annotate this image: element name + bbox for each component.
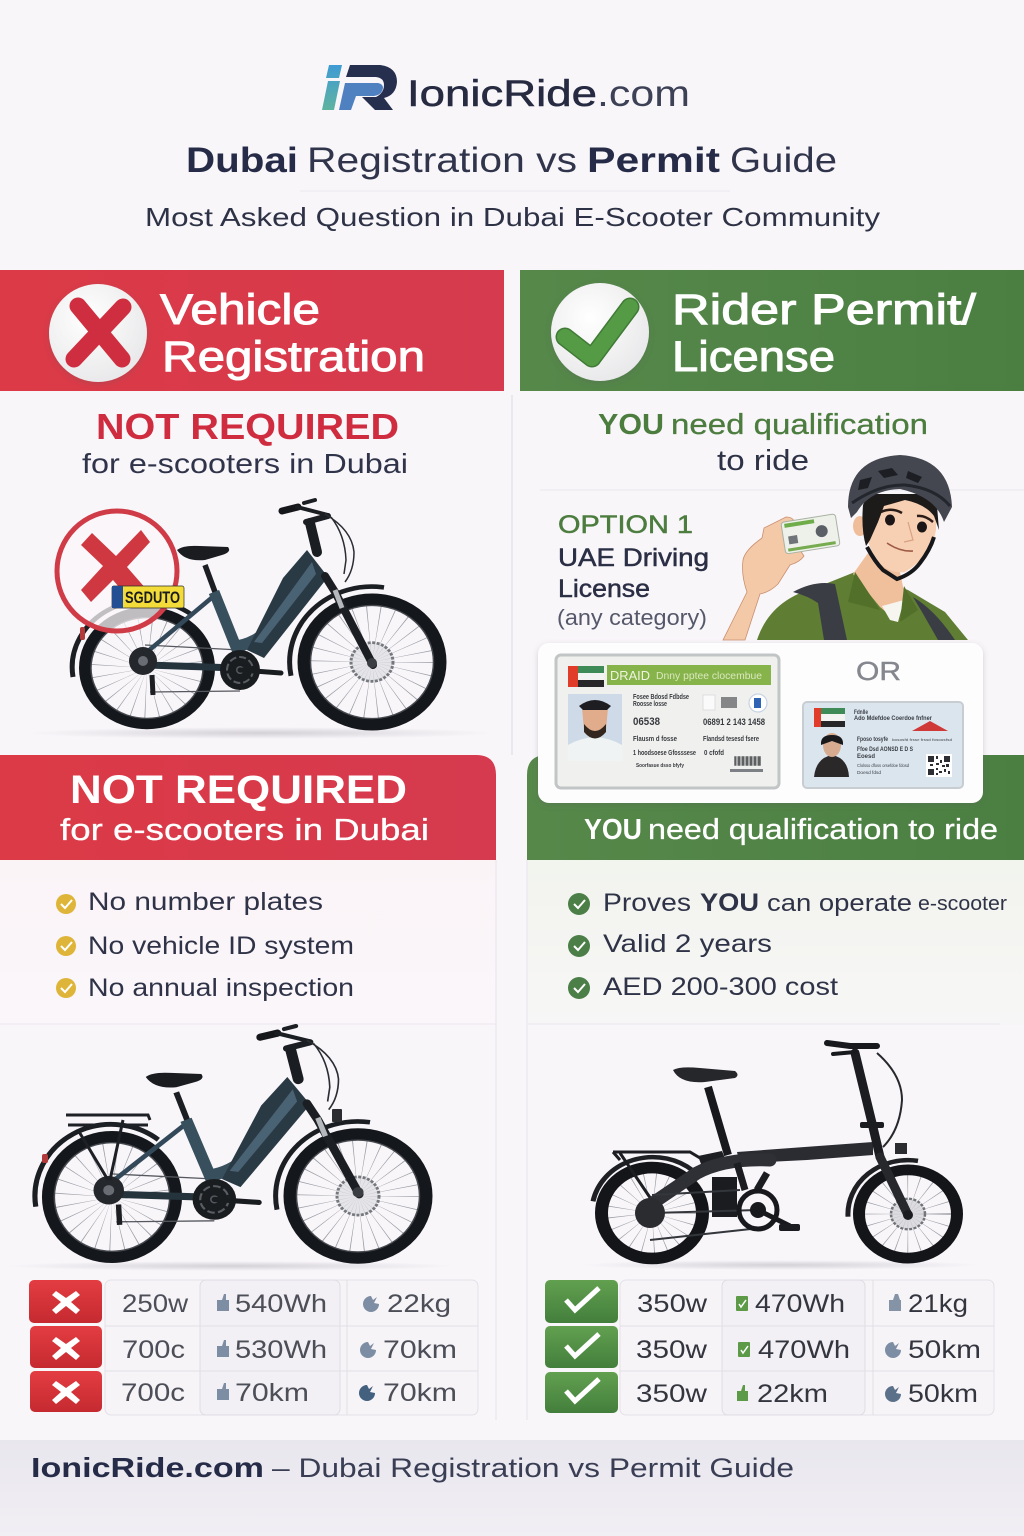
ear (853, 516, 867, 536)
helmet (848, 455, 952, 522)
licence title bar (607, 665, 771, 685)
panel: not required band: NOT REQUIRED (70, 768, 407, 812)
row 3 (30, 1371, 457, 1412)
licence fields: Flandsd tesesd fsere (703, 736, 759, 743)
icon: iR mark (322, 65, 397, 110)
chin strap (867, 537, 934, 579)
row 1: 21kg (908, 1290, 968, 1318)
licence fields: 1 hoodsoese Gfosssese (633, 750, 696, 757)
row 2: 530Wh (235, 1336, 327, 1364)
heading: vehicle registration: Vehicle (160, 286, 320, 334)
card: alternate ID: Eoesd (857, 754, 875, 760)
title: Registration vs (307, 141, 577, 180)
item: cost: AED 200-300 cost (603, 973, 838, 1001)
card: alternate ID: Ado Mdefdoe Coerdoe fnfner (854, 716, 933, 722)
card: alternate ID: Doesd fdsd (857, 770, 882, 775)
eyes and smile (881, 510, 933, 551)
panel: vehicle registration header (0, 270, 504, 391)
logo: IonicRide.com (322, 65, 690, 114)
heading: you need qualification: need qualification (671, 409, 928, 441)
card: alternate ID: Fdnlle (854, 710, 869, 716)
licence fields: 06891 2 143 1458 (703, 717, 765, 727)
licence fields: Roosse losse (633, 701, 667, 708)
heading: you need qualification: YOU (598, 409, 664, 441)
row 1 (545, 1280, 968, 1323)
footer: – Dubai Registration vs Permit Guide (272, 1453, 794, 1483)
licence fields: Soorfasue dsso bfyfy (636, 763, 684, 769)
text: OR: OR (856, 656, 901, 686)
row 2: 350w (636, 1336, 708, 1364)
row 3: 50km (908, 1380, 978, 1408)
row 1: 350w (637, 1290, 708, 1318)
row 2: 700c (122, 1336, 185, 1364)
licence title bar: DRAID (610, 668, 650, 683)
licence fields: 0 cfofd (704, 750, 724, 757)
licence title bar: Dnny pptee clocembue (656, 671, 762, 682)
panel: option 1 text (557, 511, 709, 630)
title: Dubai (186, 141, 298, 180)
heading: not required: NOT REQUIRED (96, 406, 399, 447)
row 2: 50km (908, 1336, 981, 1364)
row 3: 350w (636, 1380, 708, 1408)
logo wordmark: .com (597, 73, 690, 114)
shirt (757, 572, 968, 640)
face (866, 500, 936, 572)
card: UAE driving licence (556, 655, 779, 788)
row 1: 22kg (387, 1290, 451, 1318)
panel: licence cards (538, 643, 983, 803)
heading: vehicle registration: Registration (162, 333, 425, 381)
icon: green check (551, 283, 649, 381)
flag (568, 666, 604, 687)
panel: option 1 text: UAE Driving (558, 544, 709, 572)
logo wordmark: IonicRide (407, 73, 597, 114)
neck (853, 553, 905, 618)
row 2: 70km (383, 1336, 457, 1364)
held card (781, 514, 840, 554)
card: alternate ID: bososfd frsse frssd fosoosfsd (892, 737, 953, 742)
row 1: 540Wh (235, 1290, 327, 1318)
text: for e-scooters: for e-scooters in Dubai (82, 448, 408, 479)
row 1: 250w (122, 1290, 189, 1318)
item: proves you can operate (568, 889, 1007, 917)
row 2 (545, 1326, 981, 1368)
title (186, 141, 837, 180)
table: right specifications (545, 1280, 994, 1415)
row 3: 70km (235, 1379, 309, 1407)
licence fields (633, 694, 765, 769)
card: alternate ID (803, 702, 963, 788)
panel: right body tint (527, 860, 1024, 1025)
item: valid 2 years: Valid 2 years (603, 930, 772, 958)
hair (862, 494, 939, 546)
panel: you need qualification band (527, 755, 1024, 860)
licence fields: Flausm d fosse (633, 736, 677, 743)
item: no annual inspection: No annual inspection (88, 974, 354, 1002)
number plate: SGDUTO (125, 588, 180, 607)
heading: rider permit (672, 286, 976, 381)
card: alternate ID: Clolsso dfoss orsefdoe fdosd (857, 763, 909, 768)
illustration: rider holding licence (723, 455, 968, 640)
row 2 (30, 1326, 457, 1368)
heading: you need qualification (598, 409, 928, 477)
icon: red cross (49, 284, 147, 382)
rear rack (66, 1115, 150, 1180)
title: Permit (587, 141, 720, 180)
licence fields: 06538 (633, 716, 660, 728)
item: proves you can operate: YOU (700, 889, 759, 917)
card: alternate ID: Ffoe Dsd AONSD E D S (857, 747, 913, 753)
QR code (926, 754, 952, 777)
backpack straps (793, 583, 847, 640)
heading: rider permit: Rider Permit/ (672, 286, 976, 334)
list: permit points (568, 889, 1007, 1001)
item: valid 2 years (568, 930, 772, 958)
row 1: 470Wh (755, 1290, 845, 1318)
heading: vehicle registration (160, 286, 425, 381)
list: registration points (56, 888, 354, 1002)
panel: not required band (0, 755, 496, 860)
card: alternate ID: Fposo tosyfe (857, 737, 889, 743)
heading: rider permit: License (672, 333, 835, 381)
title: Guide (730, 141, 837, 180)
barcode (734, 756, 761, 766)
panel: you need qualification band: need qualification to ride (648, 814, 998, 846)
panel: you need qualification band: YOU (584, 814, 642, 846)
panel: option 1 text: (any category) (557, 605, 707, 630)
row 3 (545, 1372, 978, 1413)
item: proves you can operate: can operate (767, 890, 912, 917)
bike with plate crossed out (25, 500, 495, 739)
item: no number plates: No number plates (88, 888, 323, 916)
arm and hand (723, 517, 804, 640)
icon: no plate (57, 511, 184, 631)
row 1 (29, 1280, 451, 1323)
ID photo (814, 733, 849, 777)
panel: left body tint (0, 860, 496, 1025)
footer (0, 1440, 1024, 1536)
bike: step-through e-bike (5, 1026, 455, 1271)
bike: folding e-bike (580, 1043, 980, 1270)
row 3: 700c (121, 1379, 185, 1407)
row 2: 470Wh (758, 1336, 850, 1364)
item: no vehicle id: No vehicle ID system (88, 932, 354, 960)
panel: rider permit header (520, 270, 1024, 391)
row 3: 22km (757, 1380, 828, 1408)
panel: option 1 text: License (558, 575, 650, 603)
licence fields: Fosee Bdosd Fdbdse (633, 694, 689, 701)
item: proves you can operate: Proves (603, 889, 691, 917)
table: left specifications (29, 1280, 478, 1415)
flag (814, 708, 845, 727)
licence photo (568, 694, 622, 761)
panel: not required band: for e-scooters in Dubai (60, 812, 429, 847)
item: proves you can operate: e-scooter (918, 893, 1007, 915)
subtitle: Most Asked Question in Dubai E-Scooter Community (145, 202, 880, 232)
row 3: 70km (383, 1379, 457, 1407)
panel: option 1 text: OPTION 1 (558, 511, 693, 539)
table grid (620, 1280, 994, 1415)
footer: IonicRide.com (31, 1452, 264, 1483)
heading: you need qualification: to ride (717, 445, 809, 477)
logo wordmark (407, 73, 690, 114)
table grid (105, 1280, 478, 1415)
